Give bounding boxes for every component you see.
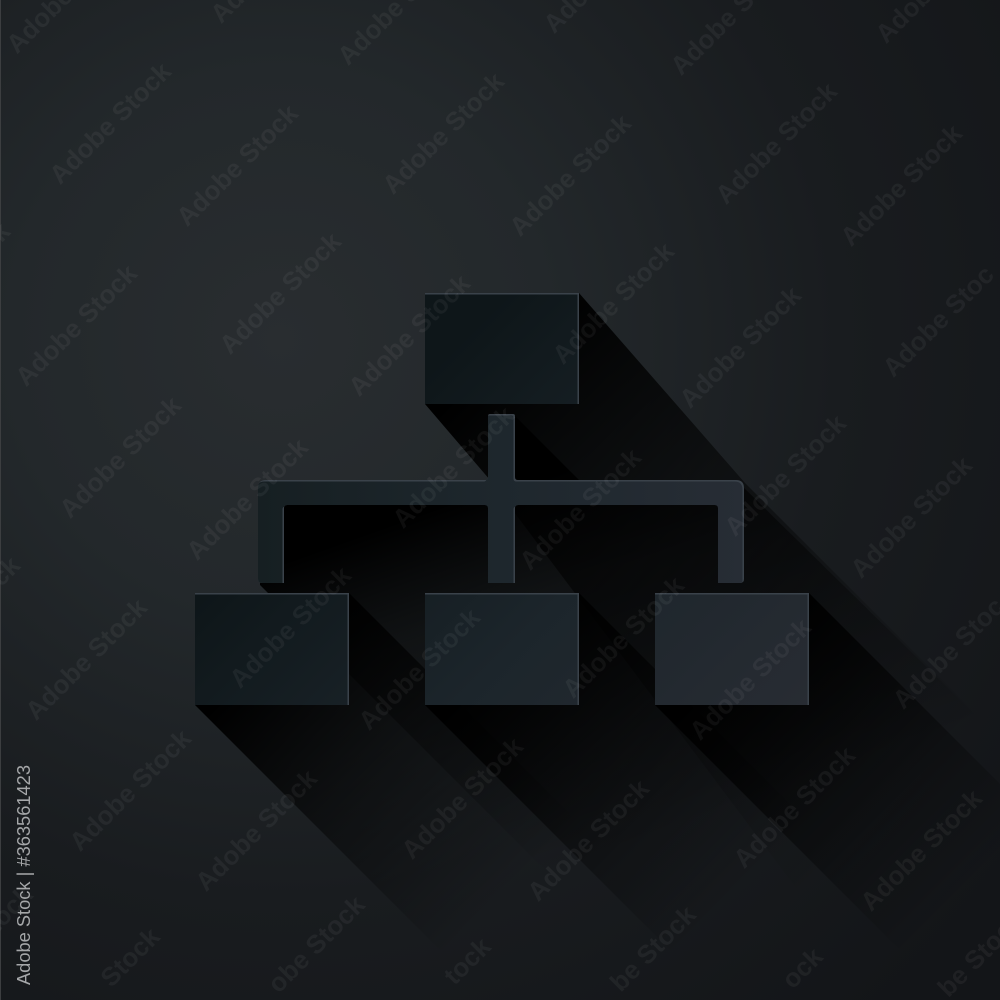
watermark pattern: Adobe Stock — [513, 442, 647, 576]
watermark pattern: Adobe Stock — [673, 280, 807, 414]
watermark pattern: Adobe Stock — [546, 236, 680, 370]
watermark pattern: Adobe Stock — [180, 432, 314, 566]
watermark pattern: Adobe Stock — [170, 98, 304, 232]
watermark pattern: Adobe Stock — [556, 570, 690, 704]
watermark pattern: obe Stock — [262, 889, 371, 998]
watermark pattern: Adobe Stock — [63, 723, 197, 857]
watermark pattern: ock — [776, 941, 829, 994]
watermark pattern: Adobe Stock — [386, 400, 520, 534]
watermark pattern: Adobe Stock — [213, 226, 347, 360]
watermark pattern: Adobe Stock — [352, 602, 486, 736]
long shadow: connector — [260, 416, 1000, 1000]
watermark pattern: Adobe Stock — [844, 450, 978, 584]
watermark pattern: Adobe Stock — [709, 76, 843, 210]
watermark pattern: Adobe Stock — [395, 731, 529, 865]
watermark pattern: Adobe Stoc — [876, 259, 1000, 383]
watermark pattern: Adobe Stock — [19, 592, 153, 726]
watermark pattern: Adobe Stock — [43, 56, 177, 190]
watermark pattern: Stock — [94, 921, 166, 993]
long shadow: middle box — [425, 593, 986, 1000]
left edge line — [0, 0, 1, 1000]
watermark pattern: Adobe Stock — [834, 118, 968, 252]
watermark pattern: Adobe Stock — [503, 108, 637, 242]
icon: bottom middle box — [424, 594, 578, 706]
stock id caption: Adobe Stock | #363561423 — [14, 765, 34, 985]
watermark pattern: Adobe Stock — [727, 740, 861, 874]
icon: top box — [424, 294, 578, 406]
watermark pattern: tock — [438, 931, 497, 990]
long shadow: right box — [655, 593, 1000, 1000]
watermark pattern: Adobe Stock — [53, 390, 187, 524]
watermark pattern: Adobe Stock — [223, 560, 357, 694]
long shadow: top box — [425, 293, 1000, 1000]
watermark pattern: Adobe Stock — [521, 773, 655, 907]
icon: connector — [256, 416, 742, 584]
hierarchy icon — [190, 285, 820, 715]
watermark pattern: Adobe Stock — [854, 783, 988, 917]
watermark pattern: Adobe Stock — [189, 763, 323, 897]
watermark pattern: Adobe Stock — [718, 408, 852, 542]
watermark pattern: Adobe Stock — [376, 66, 510, 200]
icon: bottom left box — [194, 594, 348, 706]
watermark pattern: Adobe Stock — [9, 258, 143, 392]
watermark pattern: Adobe Stock — [683, 612, 817, 746]
icon edge highlight — [190, 285, 820, 715]
icon: bottom right box — [654, 594, 808, 706]
watermark pattern: be Stock — [604, 899, 702, 997]
watermark pattern: Adobe Stock — [342, 268, 476, 402]
long shadow: left box — [195, 593, 756, 1000]
